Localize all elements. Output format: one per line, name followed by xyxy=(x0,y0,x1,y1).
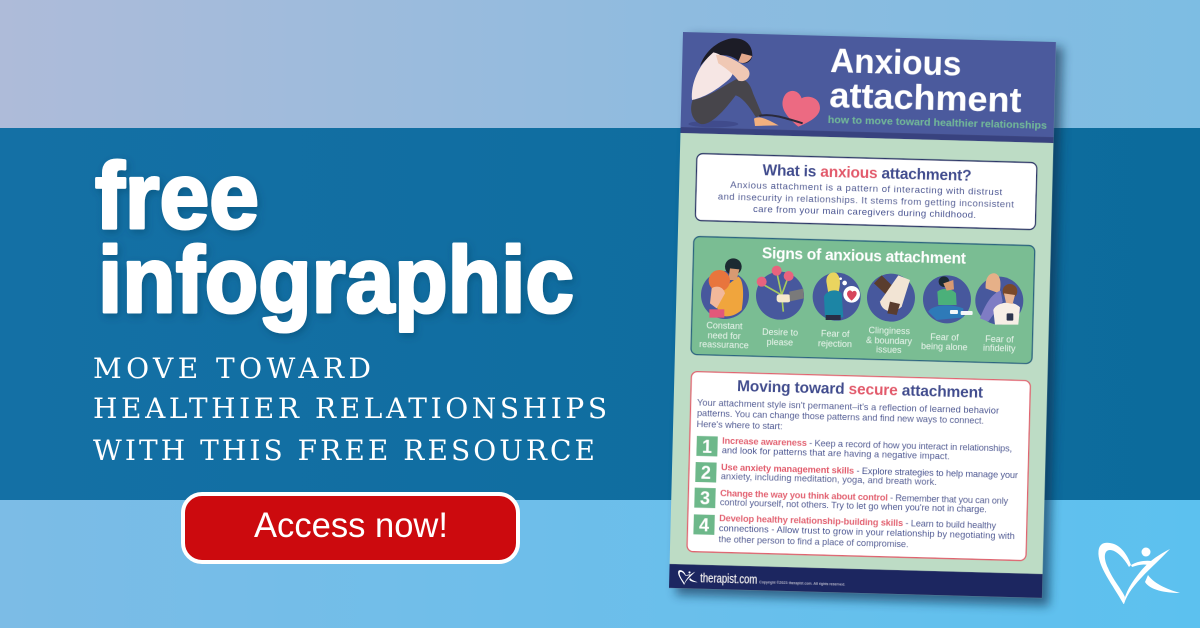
subheading text xyxy=(93,352,607,467)
panel: what is anxious attachment xyxy=(695,153,1037,230)
sign labels: Fear of xyxy=(985,334,1014,344)
sign labels: Desire to xyxy=(762,327,798,338)
sign labels: & boundary xyxy=(866,335,913,346)
step 4: connections - Allow trust to grow in your relationship by negotiating with xyxy=(719,523,1015,541)
icon: desire to please xyxy=(756,266,804,320)
panel heading: What is anxious attachment? xyxy=(762,162,972,185)
step 3: control yourself, not others. Try to let go when you're not in charge. xyxy=(720,497,987,515)
subheading text: WITH THIS FREE RESOURCE xyxy=(93,434,595,467)
poster header band xyxy=(680,32,1056,143)
icon: clinginess and boundary issues xyxy=(867,274,915,322)
poster title: attachment xyxy=(829,76,1022,120)
sign labels: Fear of xyxy=(930,332,959,343)
step 2: 2 xyxy=(701,463,711,483)
sign labels: issues xyxy=(876,344,902,355)
panel body text xyxy=(717,180,1015,222)
intro text: patterns. You can change those patterns and find new ways to connect. xyxy=(697,408,984,426)
panel body text: care from your main caregivers during childhood. xyxy=(753,204,976,221)
poster subtitle: how to move toward healthier relationships xyxy=(828,114,1047,132)
sign labels: reassurance xyxy=(699,339,749,350)
step 3: Change the way you think about control - Remember that you can only xyxy=(720,488,1009,506)
poster drop shadow xyxy=(676,36,1063,606)
illustration: woman with chained heart xyxy=(688,38,820,127)
button: access now: Access now! xyxy=(254,506,448,545)
poster footer xyxy=(669,564,1043,598)
sign labels: infidelity xyxy=(983,343,1016,354)
subheading text: MOVE TOWARD xyxy=(93,352,371,385)
panel: moving toward secure attachment xyxy=(687,371,1030,561)
button: access now xyxy=(183,494,518,562)
step 4: the other person to find a place of compromise. xyxy=(718,534,909,549)
sign labels: Clinginess xyxy=(868,325,911,336)
poster title xyxy=(829,42,1023,120)
footer brand name: therapist.com xyxy=(700,570,757,587)
step 1 xyxy=(696,435,1012,465)
step 4: Develop healthy relationship-building skills - Learn to build healthy xyxy=(719,513,997,531)
subheading text: HEALTHIER RELATIONSHIPS xyxy=(93,392,607,425)
icon: therapist.com logo xyxy=(1098,543,1180,604)
panel body text: Anxious attachment is a pattern of interacting with distrust xyxy=(730,180,1003,198)
headline: free infographic: free xyxy=(95,143,259,248)
step 4: 4 xyxy=(699,515,709,535)
panel body text: and insecurity in relationships. It stems from getting inconsistent xyxy=(718,192,1014,211)
sign labels: need for xyxy=(708,330,741,341)
step 2: anxiety, including meditation, yoga, and breath work. xyxy=(721,471,937,487)
step 2 xyxy=(695,462,1018,491)
sign labels xyxy=(699,320,1017,358)
icon: constant need for reassurance xyxy=(701,258,749,319)
signs heading: Signs of anxious attachment xyxy=(762,245,966,268)
icon: fear of infidelity xyxy=(975,273,1023,325)
step 1: and look for patterns that are having a negative impact. xyxy=(722,445,950,461)
poster title: Anxious xyxy=(830,42,962,84)
icon: footer logo xyxy=(678,570,698,585)
icons: signs of anxious attachment xyxy=(701,258,1023,325)
icon: fear of being alone xyxy=(923,275,973,323)
sign labels: rejection xyxy=(818,338,852,349)
step 2: Use anxiety management skills - Explore strategies to help manage your xyxy=(721,462,1018,480)
headline: free infographic: infographic xyxy=(98,227,574,332)
sign labels: please xyxy=(766,337,793,348)
poster background xyxy=(669,32,1056,598)
moving heading: Moving toward secure attachment xyxy=(737,378,983,402)
panel: signs of anxious attachment xyxy=(691,236,1035,364)
step 4 xyxy=(693,513,1015,552)
poster xyxy=(669,32,1056,598)
step 1: Increase awareness - Keep a record of how you interact in relationships, xyxy=(722,436,1012,453)
sign labels: Fear of xyxy=(821,329,850,339)
sign labels: being alone xyxy=(921,341,968,352)
intro text: Your attachment style isn't permanent–it's a reflection of learned behavior xyxy=(697,398,999,416)
step 3: 3 xyxy=(700,488,710,509)
headline: free infographic xyxy=(95,143,574,332)
intro text: Here's where to start: xyxy=(697,419,783,431)
footer copyright: Copyright ©2023 therapist.com. All rights reserved. xyxy=(759,580,845,587)
step 3 xyxy=(694,487,1009,517)
icon: fear of rejection xyxy=(813,273,861,321)
step 1: 1 xyxy=(702,437,712,457)
intro text xyxy=(696,398,999,437)
sign labels: Constant xyxy=(706,320,743,331)
